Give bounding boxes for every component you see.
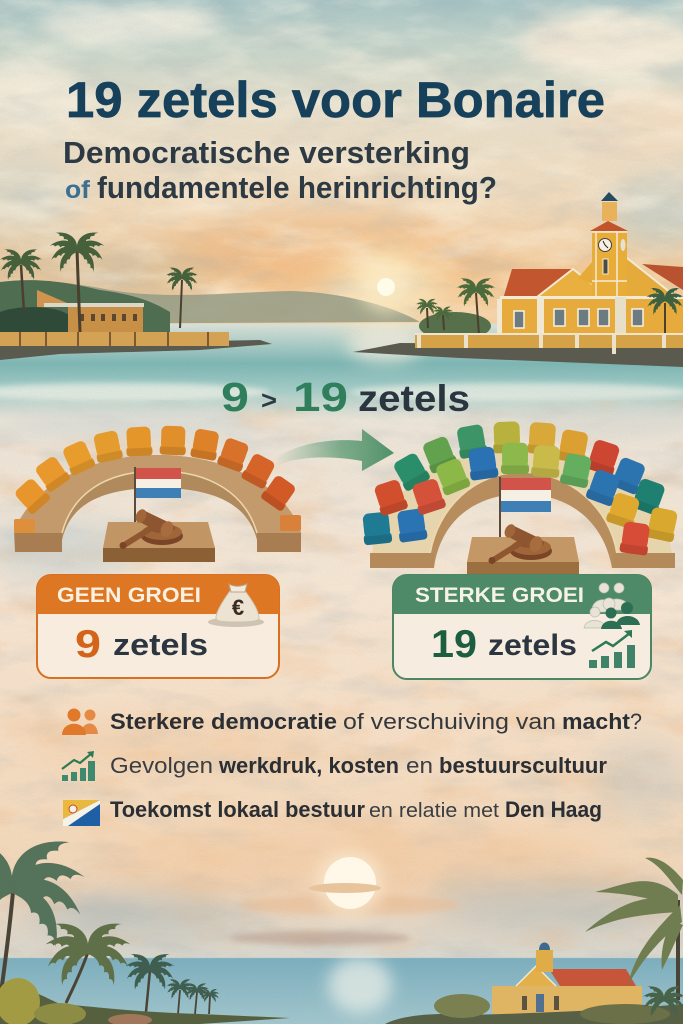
bullet: future: Toekomst lokaal bestuur [110,797,365,822]
orange seats [13,426,298,515]
palm trees left [0,226,198,332]
left shore [0,978,290,1024]
podium with gavel [103,508,215,562]
coloured seats, outer row [361,421,679,545]
card: geen groei [37,575,279,678]
bullet: democracy [62,708,642,735]
right shore [385,994,683,1024]
curved council desk [14,455,301,552]
title: 19 zetels voor Bonaire [66,72,605,128]
vegetation and palms [416,274,496,340]
bullet: consequences [62,751,607,781]
bullet: future [63,797,602,826]
bullet: democracy: of verschuiving van [343,709,556,734]
arrow from 9 to 19 seats [275,429,394,471]
curved council desk [370,449,675,568]
label: STERKE GROEI [415,584,584,607]
coloured seats, inner row [396,443,651,556]
chamber: 19 seats [361,421,679,575]
value: 19 [431,623,477,666]
growth chart icon [589,630,635,668]
flag [499,477,551,541]
subtitle: Democratische versterking [63,135,470,170]
icon: Bonaire flag [63,800,100,826]
sea wall and rocks [0,332,272,360]
right palm tree [585,858,683,1017]
card: sterke groei [393,575,651,679]
bullet: democracy: ? [630,709,642,734]
card: geen groei: zetels [113,627,208,662]
bullet: consequences: Gevolgen [110,753,213,778]
bullet: consequences: en [406,753,433,778]
heading: 9 > 19 zetels: 19 [293,374,348,420]
fort building [37,290,144,332]
heading: 9 > 19 zetels [221,374,470,420]
left palm trees [0,824,219,1014]
sun and reflection [309,849,392,1013]
building [497,192,683,335]
bullet: future: Den Haag [505,797,602,822]
heading: 9 > 19 zetels: zetels [358,378,470,419]
scene: bottom sunset and sea [0,824,683,1024]
sun over horizon [360,260,412,312]
small town hall [492,942,642,1014]
icon: people [62,708,98,735]
bullet: democracy: Sterkere democratie [110,709,337,734]
sea wall and rocks [353,333,683,367]
money bag icon [208,584,264,627]
chamber: 9 seats [13,426,301,562]
bullet: consequences: werkdruk, kosten [218,753,399,778]
heading: 9 > 19 zetels: 9 [221,374,249,420]
bullet: consequences: bestuurscultuur [439,753,607,778]
bullet: future: en relatie met [369,800,499,822]
subtitle: fundamentele herinrichting? [97,170,497,205]
podium with gavel [467,523,579,575]
scene: town hall on the right [353,192,683,367]
subtitle: of [65,176,91,204]
label: GEEN GROEI [57,584,201,607]
people icon [584,583,640,629]
flag [134,467,181,527]
heading: 9 > 19 zetels: > [261,385,277,415]
scene: top-left coast with fort and palms [0,226,420,360]
money bag icon: € [232,595,244,620]
icon: growth chart [62,751,95,781]
card: sterke groei: zetels [488,629,577,662]
subtitle [63,135,497,205]
value: 9 [75,623,101,666]
bullet: democracy: macht [562,709,631,734]
